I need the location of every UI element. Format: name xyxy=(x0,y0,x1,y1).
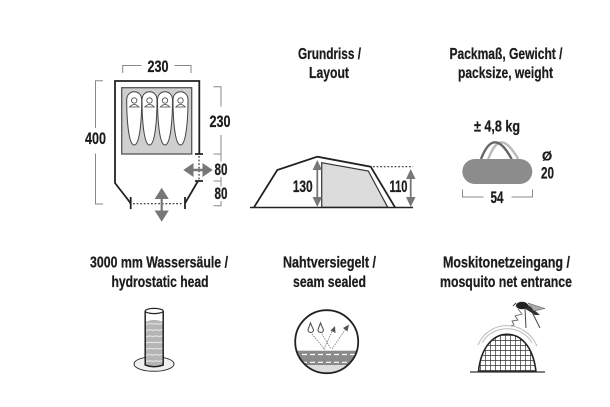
icon: water column xyxy=(134,308,174,371)
arrows: door openings xyxy=(155,163,213,222)
mosquito xyxy=(511,302,545,328)
dimension labels: 230 xyxy=(210,112,230,131)
dimension brackets xyxy=(96,66,221,206)
glass cylinder xyxy=(145,311,163,367)
reflection lines xyxy=(312,327,347,350)
height labels: 110 xyxy=(390,177,408,196)
panel: tent side view xyxy=(250,157,416,208)
dimension labels xyxy=(85,57,230,203)
sleeping bags xyxy=(127,92,188,145)
heading: pack size xyxy=(450,46,563,82)
heading: layout: Layout xyxy=(309,65,349,82)
dimension labels: 80 xyxy=(214,160,228,179)
icon: seam sealed xyxy=(294,310,360,375)
heading: pack size: packsize, weight xyxy=(458,65,553,82)
height labels xyxy=(293,177,408,196)
fabric layers xyxy=(297,350,356,372)
signal arcs xyxy=(478,326,537,346)
weight label: ± 4,8 kg xyxy=(474,118,520,136)
height arrows xyxy=(313,160,416,207)
inner tent xyxy=(122,88,192,154)
ground line xyxy=(250,206,413,208)
heading: seam sealed: Nahtversiegelt / xyxy=(283,254,377,272)
dotted height guide xyxy=(373,166,413,168)
panel: pack bag: 20 xyxy=(541,164,554,182)
reflection arrow heads xyxy=(330,324,349,333)
entrance dotted lines xyxy=(133,156,199,204)
heading: hydrostatic head xyxy=(90,254,229,291)
heading: seam sealed: seam sealed xyxy=(293,274,366,291)
length label and bracket: 54 xyxy=(490,188,504,207)
base disc xyxy=(134,357,174,371)
dimension labels: 80 xyxy=(214,184,228,203)
heading: hydrostatic head: hydrostatic head xyxy=(112,274,208,291)
bag handles xyxy=(481,142,518,159)
heading: hydrostatic head: 3000 mm Wassersäule / xyxy=(90,254,229,272)
icon: mosquito net xyxy=(470,302,545,372)
heading: pack size: Packmaß, Gewicht / xyxy=(450,46,563,63)
diameter label: Ø xyxy=(542,148,552,164)
dimension labels: 230 xyxy=(148,57,168,76)
heading: layout xyxy=(298,46,362,82)
heading: mosquito net entrance: mosquito net entrance xyxy=(440,274,572,291)
water drops xyxy=(308,323,324,332)
panel: floor plan xyxy=(85,57,230,222)
water fill xyxy=(145,320,163,367)
heading: seam sealed xyxy=(283,254,377,291)
mesh dome xyxy=(478,334,536,372)
tent outline xyxy=(115,81,203,209)
heading: mosquito net entrance xyxy=(440,254,572,291)
ground line xyxy=(470,371,545,373)
inner tent side xyxy=(322,163,388,207)
dimension labels: 400 xyxy=(85,129,106,148)
panel: pack bag xyxy=(462,118,554,207)
tent profile xyxy=(254,157,395,207)
bag body xyxy=(462,159,532,184)
heading: mosquito net entrance: Moskitonetzeingang / xyxy=(443,254,571,272)
heading: layout: Grundriss / xyxy=(298,46,362,63)
circle border xyxy=(295,310,358,373)
height labels: 130 xyxy=(293,177,313,196)
